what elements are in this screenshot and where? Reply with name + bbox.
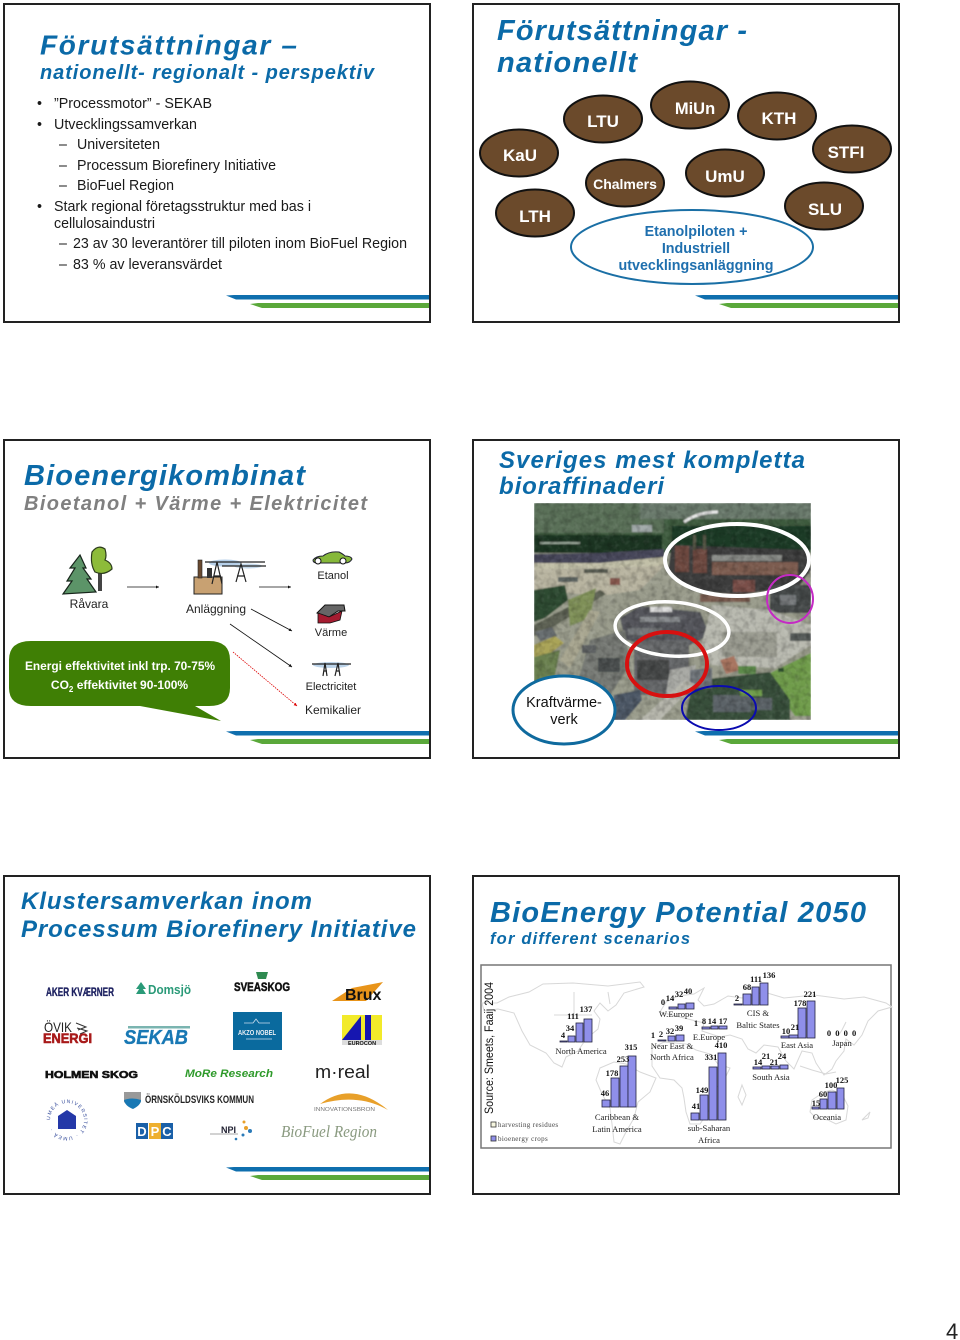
bars: North America: 137 [580, 1004, 593, 1014]
bars: CIS and Baltic States [734, 970, 780, 1030]
bars: Near East and North Africa: 2 [659, 1029, 663, 1039]
callout: Kraftvärmeverk: Kraftvärme- [526, 695, 602, 711]
forest and houses [534, 518, 811, 554]
bars: Caribbean and Latin America: 253 [617, 1054, 629, 1064]
logo: Övik Energi: ÖVIK [44, 1018, 73, 1035]
bars: W. Europe: 32 [675, 989, 683, 999]
bullet list: 23 av 30 leverantörer till piloten inom BioFuel Region [73, 236, 407, 252]
panel: Klustersamverkan [3, 875, 431, 1195]
title: Förutsättningar: Förutsättningar – [40, 30, 297, 60]
label: Anläggning: Anläggning [186, 602, 246, 616]
bullet list: – [59, 158, 67, 174]
bars: East Asia [781, 989, 816, 1050]
bars: Oceania: 15 [812, 1098, 820, 1108]
label: Etanol: Etanol [317, 570, 349, 582]
title: Bioenergikombinat: Bioenergikombinat [24, 460, 306, 492]
logo: Sveaskog: SVEASKOG [234, 980, 290, 994]
bullet list: ”Processmotor” - SEKAB [54, 96, 212, 112]
title: BioEnergy Potential 2050: BioEnergy Potential 2050 [490, 897, 866, 929]
bars: East Asia: 10 [782, 1026, 790, 1036]
bars: sub-Saharan Africa: 149 [696, 1085, 708, 1095]
logo: NPI: NPI [221, 1125, 236, 1135]
callout: efficiency: 2 [69, 685, 74, 694]
logo: SEKAB: SEKAB [124, 1027, 188, 1049]
logo: Brux: Brux [345, 987, 382, 1004]
bars: Oceania: 100 [825, 1080, 837, 1090]
bars: E. Europe [693, 1016, 728, 1042]
bars: E. Europe: 17 [719, 1016, 728, 1026]
title: Förutsättningar nationellt [497, 15, 747, 79]
bars: Oceania [812, 1075, 848, 1122]
bars: E. Europe: 8 [702, 1016, 706, 1026]
bullet list: – [59, 137, 67, 153]
bars: W. Europe: 14 [666, 993, 675, 1003]
bars: sub-Saharan Africa: 41 [692, 1101, 700, 1111]
bars: CIS and Baltic States: 136 [763, 970, 775, 980]
parking [700, 605, 811, 668]
yard [534, 566, 664, 596]
icon: plant [194, 560, 266, 594]
logo: Eurocon [342, 1015, 382, 1047]
logo: MoRe Research: MoRe Research [185, 1068, 273, 1080]
title: Sveriges mest kompletta bioraffinaderi [499, 447, 805, 500]
logo: DPC [136, 1123, 173, 1139]
title: Sveriges mest kompletta bioraffinaderi: Sveriges mest kompletta [499, 447, 805, 474]
bars: Oceania: 60 [819, 1089, 827, 1099]
bars: CIS and Baltic States: 111 [750, 974, 762, 984]
callout: efficiency: CO [51, 678, 69, 692]
aerial photo [534, 503, 811, 720]
bars: North America: 4 [561, 1030, 566, 1040]
bars: South Asia: South Asia [752, 1072, 790, 1082]
bars: Near East and North Africa [650, 1023, 694, 1062]
subtitle: perspektiv: nationellt- regionalt - perspektiv [40, 62, 376, 84]
bars: Caribbean and Latin America [592, 1042, 642, 1134]
panel: Sveriges mest kompletta bioraffinaderi [473, 440, 899, 758]
bullet list: Utvecklingssamverkan [54, 117, 197, 133]
legend: bioenergy crops [498, 1135, 548, 1143]
bars: North America: 34 [566, 1023, 575, 1033]
chart: world map with bioenergy potentials [481, 965, 892, 1148]
bars: E. Europe: 1 [694, 1018, 698, 1028]
logo: DPC: C [162, 1124, 172, 1139]
bullet list: 83 % av leveransvärdet [73, 257, 222, 273]
label: Kemikalier: Kemikalier [305, 703, 361, 717]
ellipse: pilot plant: utvecklingsanläggning [618, 258, 774, 274]
ovals: universities and institutes: KaU [503, 146, 537, 165]
bars: CIS and Baltic States: 2 [735, 993, 739, 1003]
logo: Övik Energi: ENERGI [43, 1030, 92, 1046]
ovals: universities and institutes: LTU [587, 112, 619, 131]
title: Förutsättningar nationellt: nationellt [497, 47, 638, 79]
logo: Innovationsbron: INNOVATIONSBRON [314, 1107, 375, 1113]
bars: North America [555, 1004, 607, 1056]
logo: DPC: P [151, 1124, 160, 1139]
ovals: universities and institutes: LTH [519, 207, 551, 226]
logo: Övik Energi [43, 1018, 92, 1046]
bars: North America: North America [555, 1046, 607, 1056]
logo: Akzo Nobel [233, 1012, 282, 1050]
panel: Förutsättningar regionalt [4, 4, 430, 322]
red building group [634, 640, 689, 695]
bullet list: • [37, 199, 42, 215]
bars: Near East and North Africa: Near East & [651, 1041, 694, 1051]
bullet list: • [37, 96, 42, 112]
icon: power lines [312, 662, 351, 676]
bars: sub-Saharan Africa: Africa [698, 1135, 720, 1145]
river [534, 549, 664, 563]
bars: Near East and North Africa: 1 [651, 1030, 655, 1040]
logo: Akzo Nobel: AKZO NOBEL [238, 1028, 276, 1037]
title: Sveriges mest kompletta bioraffinaderi: bioraffinaderi [499, 473, 665, 500]
logo: Domsjö: Domsjö [148, 983, 191, 997]
ellipse: pilot plant: Etanolpiloten + [645, 224, 747, 240]
label: Electricitet: Electricitet [306, 681, 356, 693]
bullet list: – [59, 178, 67, 194]
logo: Umeå universitet: UMEÅ UNIVERSITET · UMEÅ · [46, 1100, 88, 1141]
label: Värme: Värme [315, 627, 347, 639]
bars: W. Europe: 0 [661, 997, 665, 1007]
map outline [482, 982, 892, 1144]
bullet list: Stark regional företagsstruktur med bas i [54, 199, 311, 215]
logo: NPI [210, 1120, 252, 1140]
ovals: universities and institutes: KTH [762, 109, 796, 128]
bars: Japan: Japan [832, 1038, 852, 1048]
bars: sub-Saharan Africa: sub-Saharan [688, 1123, 731, 1133]
bars: East Asia: 21 [791, 1022, 799, 1032]
legend [491, 1121, 558, 1143]
panel: Förutsättningar nationellt [473, 4, 899, 322]
title: Förutsättningar nationellt: Förutsättningar - [497, 15, 747, 47]
callout: efficiency [9, 641, 230, 721]
panel: BioEnergy Potential [473, 876, 899, 1194]
bars: Japan: 0 0 0 0 [827, 1028, 857, 1038]
callout: Kraftvärmeverk [513, 676, 615, 744]
title: Klustersamverkan: Klustersamverkan inom [21, 888, 312, 915]
bars: Japan [827, 1028, 857, 1048]
callout: efficiency: effektivitet 90-100% [73, 678, 188, 692]
bars: Caribbean and Latin America: 46 [601, 1088, 609, 1098]
logo: Sveaskog [234, 972, 290, 994]
factory [672, 526, 811, 550]
bars: South Asia: 14 [754, 1057, 763, 1067]
bottom buildings [685, 672, 790, 720]
bars: Caribbean and Latin America: Caribbean & [595, 1112, 639, 1122]
bars: sub-Saharan Africa: 410 [715, 1040, 727, 1050]
ellipse: pilot plant: Industriell [662, 241, 730, 257]
logo: Innovationsbron [314, 1093, 388, 1113]
title: Klustersamverkan: Processum Biorefinery Initiative [21, 916, 416, 943]
logo: Aker Kværner: AKER KVÆRNER [46, 987, 114, 999]
bars: Oceania: Oceania [813, 1112, 841, 1122]
title: Klustersamverkan [21, 888, 416, 943]
mid building [620, 606, 707, 646]
bars: South Asia: 21 [762, 1051, 770, 1061]
logo: m-real: m·real [315, 1062, 370, 1082]
bars: E. Europe: E.Europe [693, 1032, 725, 1042]
bars: South Asia: 21 [770, 1057, 778, 1067]
bars: East Asia: 178 [794, 998, 806, 1008]
bullet list: cellulosaindustri [54, 216, 155, 232]
subtitle: Bioetanol + Värme + Elektricitet: Bioetanol + Värme + Elektricitet [24, 493, 368, 515]
bars: W. Europe: 40 [684, 986, 692, 996]
bars: East Asia: 221 [804, 989, 816, 999]
arrows [127, 587, 297, 706]
bars: CIS and Baltic States: 68 [743, 982, 751, 992]
bars: CIS and Baltic States: Baltic States [736, 1020, 780, 1030]
source note: Source: Smeets, Faaij 2004 [484, 981, 496, 1114]
bullet list: BioFuel Region [77, 178, 174, 194]
bars: W. Europe: W.Europe [659, 1009, 693, 1019]
bullet list: – [59, 236, 67, 252]
bars: South Asia: 24 [778, 1051, 787, 1061]
label: Råvara: Råvara [70, 597, 109, 611]
bars: sub-Saharan Africa: 331 [705, 1052, 717, 1062]
ovals: universities and institutes: SLU [808, 200, 842, 219]
icon: house [317, 605, 345, 623]
ovals: universities and institutes: MiUn [675, 100, 715, 118]
left forest and rails [534, 585, 568, 622]
bars: E. Europe: 14 [708, 1016, 717, 1026]
ellipse: pilot plant [571, 210, 813, 284]
callout: Kraftvärmeverk: verk [550, 712, 578, 728]
bars: Caribbean and Latin America: 178 [606, 1068, 618, 1078]
ovals: universities and institutes [480, 82, 891, 236]
logo: Örnsköldsviks kommun [124, 1092, 254, 1109]
bullet list [37, 96, 407, 273]
bullet list: • [37, 117, 42, 133]
highlight ellipses [613, 524, 813, 730]
ovals: universities and institutes: STFI [828, 143, 864, 162]
bars: South Asia [752, 1051, 790, 1082]
logo: Eurocon: EUROCON [348, 1041, 376, 1047]
bars: Caribbean and Latin America: 315 [625, 1042, 637, 1052]
magenta group [770, 585, 811, 613]
bars: W. Europe [659, 986, 694, 1019]
bars: East Asia: East Asia [781, 1040, 813, 1050]
bars: Near East and North Africa: 39 [675, 1023, 683, 1033]
logo: DPC: D [137, 1124, 147, 1139]
logo: Brux [332, 982, 383, 1004]
bars: Oceania: 125 [836, 1075, 848, 1085]
bullet list: Processum Biorefinery Initiative [77, 158, 276, 174]
bars: Near East and North Africa: North Africa [650, 1052, 694, 1062]
bars: North America: 111 [567, 1011, 579, 1021]
logo: Örnsköldsviks kommun: ÖRNSKÖLDSVIKS KOMMUN [145, 1093, 254, 1106]
lower left plant [575, 630, 630, 695]
icon: trees [63, 547, 112, 594]
panel: Bioenergikombinat [4, 440, 430, 758]
subtitle: for different scenarios: for different scenarios [490, 930, 690, 948]
ovals: universities and institutes: UmU [705, 167, 745, 186]
logo: BioFuel Region: BioFuel Region [281, 1122, 377, 1141]
icon: car [313, 552, 352, 564]
bars: CIS and Baltic States: CIS & [747, 1008, 769, 1018]
bars: sub-Saharan Africa [688, 1040, 731, 1145]
bullet list: Universiteten [77, 137, 160, 153]
ovals: universities and institutes: Chalmers [593, 176, 657, 192]
green field [766, 653, 811, 716]
bullet list: – [59, 257, 67, 273]
bars: Near East and North Africa: 32 [666, 1026, 674, 1036]
callout: efficiency: Energi effektivitet inkl trp. 70-75% [25, 659, 215, 673]
logo: Holmen Skog: HOLMEN SKOG [45, 1070, 138, 1081]
legend: harvesting residues [498, 1121, 558, 1129]
bars: Caribbean and Latin America: Latin America [592, 1124, 642, 1134]
